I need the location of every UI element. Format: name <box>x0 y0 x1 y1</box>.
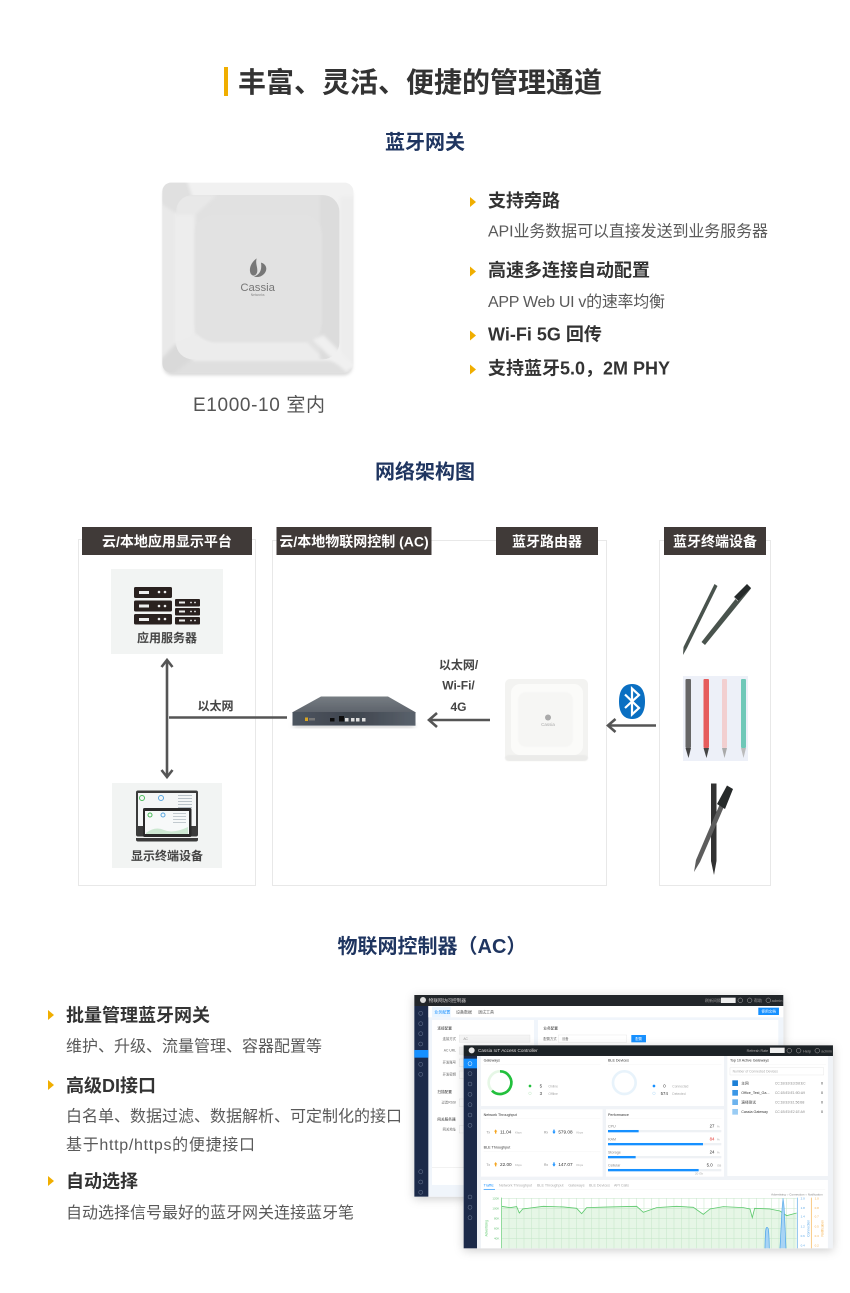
title: 丰富、灵活、便捷的管理通道 <box>238 66 602 98</box>
screenshot: front window: 0 <box>821 1110 823 1114</box>
image: gateway E1000 <box>160 180 357 377</box>
screenshot: back window: 连接配置 <box>437 1025 452 1030</box>
screenshot: back window: 使用文档 <box>761 1009 776 1014</box>
screenshot: front window: 主网 <box>741 1080 749 1085</box>
screenshot: front window: Rx <box>544 1130 548 1134</box>
screenshot: back window: 物联网访问控制器 <box>429 997 466 1004</box>
screenshot: front window: 0.5 <box>815 1224 819 1228</box>
screenshot: front window: 1.4 <box>801 1215 805 1219</box>
screenshot: front window: Traffic <box>484 1184 494 1188</box>
panel: Bluetooth devices <box>660 527 770 886</box>
screenshot: front window: Kbps <box>576 1163 584 1167</box>
screenshot: back window: admin <box>772 998 782 1003</box>
screenshot: front window: 60K <box>494 1227 499 1231</box>
screenshot: front window: 40K <box>494 1237 499 1241</box>
screenshot: front window: Kbps <box>576 1130 584 1134</box>
screenshot: front window: Connection <box>806 1220 810 1237</box>
screenshot: front window: 1.0 <box>815 1197 819 1201</box>
feature: 支持旁路: API业务数据可以直接发送到业务服务器 <box>488 222 768 240</box>
screenshot: back window: AC URL <box>444 1049 456 1053</box>
screenshot: front window: 0 <box>821 1081 823 1085</box>
screenshot: front window: 22.00 <box>500 1162 512 1167</box>
icon: monitor and laptop <box>136 790 198 842</box>
screenshot: front window: 24 <box>710 1150 715 1155</box>
heading: 蓝牙网关: 蓝牙网关 <box>385 131 465 154</box>
screenshot: back window: 网关地址 <box>443 1127 457 1132</box>
image: coloured pens <box>683 676 748 761</box>
heading: 网络架构图: 网络架构图 <box>375 460 475 484</box>
screenshot: back window: 开发密钥 <box>443 1072 457 1077</box>
screenshot: front window: Online <box>548 1085 558 1089</box>
feature: 自动选择: 自动选择 <box>66 1172 138 1192</box>
card: display device: 显示终端设备 <box>131 848 203 863</box>
screenshot: front window: Office_Test_Ga... <box>741 1091 769 1095</box>
icon: Bluetooth <box>619 684 645 719</box>
screenshot: front window: 27 <box>710 1124 715 1129</box>
feature: 高速多连接自动配置 <box>470 260 665 311</box>
screenshot: front window: 120K <box>492 1197 499 1201</box>
screenshot: front window: BLE Throughput <box>537 1184 564 1188</box>
screenshot: front window: Top 10 Active Gateways <box>730 1058 769 1062</box>
screenshot: front window: 20 Gb <box>695 1172 703 1176</box>
image: mini gateway <box>505 679 588 761</box>
feature: 批量管理蓝牙网关: 维护、升级、流量管理、容器配置等 <box>66 1038 322 1056</box>
screenshot: front window: % <box>717 1151 720 1155</box>
panel header: router <box>496 527 598 555</box>
feature: 支持旁路: 支持旁路 <box>488 190 560 211</box>
screenshot: front window: BLE Devices <box>608 1058 629 1062</box>
screenshot: front window: 0 <box>821 1091 823 1095</box>
arrow: pens to router <box>608 719 656 732</box>
feature: 高级DI接口: 基于http/https的便捷接口 <box>66 1136 255 1154</box>
screenshot: front window: 84 <box>710 1137 715 1142</box>
screenshot: front window: CC:1B:E0:E3:D8:EC <box>775 1081 806 1085</box>
screenshot: front window: Kbps <box>515 1163 522 1167</box>
screenshot: front window: Kbps <box>515 1130 522 1134</box>
connector: ethernet line <box>169 716 287 719</box>
screenshot: back window: 配置方式 <box>543 1036 557 1041</box>
screenshot: front window: Cassia Gateway <box>741 1110 768 1114</box>
image: AC appliance <box>292 696 416 728</box>
feature: 支持蓝牙5.0: 支持蓝牙5.0，2M PHY <box>488 358 670 378</box>
screenshot: front window <box>464 1045 833 1248</box>
screenshot: front window: 1.8 <box>801 1206 805 1210</box>
feature: 自动选择 <box>48 1172 354 1222</box>
screenshot: back window: 设备 <box>562 1036 569 1041</box>
panel header: 蓝牙终端设备 <box>673 534 757 550</box>
dashboard screenshots <box>414 995 833 1248</box>
screenshot: back window: 设备数据 <box>456 1008 472 1014</box>
card: application server <box>111 569 223 654</box>
label: ethernet wifi 4G: 以太网/ <box>439 657 479 672</box>
arrow: router to AC <box>429 713 490 727</box>
panel header: AC <box>276 527 432 555</box>
logo: Cassia: Networks <box>251 293 265 297</box>
card: application server: 应用服务器 <box>137 630 197 645</box>
screenshot: front window: Rx <box>544 1163 548 1167</box>
screenshot: front window: 147.07 <box>558 1162 573 1167</box>
screenshot: front window: Detected <box>672 1092 686 1096</box>
screenshot: back window: 网关服务器 <box>437 1116 456 1121</box>
screenshot: front window: Performance <box>608 1113 629 1117</box>
screenshot: front window: 演绎测试 <box>741 1099 756 1104</box>
screenshot: front window: RAM <box>608 1138 616 1142</box>
label: ethernet wifi 4G: Wi-Fi/ <box>442 678 475 692</box>
feature list: AC <box>48 1004 402 1222</box>
screenshot: front window: 80K <box>494 1217 499 1221</box>
feature: 自动选择: 自动选择信号最好的蓝牙网关连接蓝牙笔 <box>66 1204 354 1222</box>
screenshot: back window: 配置 <box>635 1036 643 1041</box>
feature: 高级DI接口: 白名单、数据过滤、数据解析、可定制化的接口 <box>66 1108 402 1126</box>
label: ethernet wifi 4G <box>439 657 479 714</box>
logo: Cassia <box>240 258 276 297</box>
panel header <box>82 527 252 555</box>
label: 以太网 (left): 以太网 <box>197 698 234 713</box>
screenshot: front window: % <box>717 1138 720 1142</box>
feature: 高级DI接口 <box>48 1075 402 1154</box>
image: mini gateway: Cassia <box>541 722 555 727</box>
panel header: AC: 云/本地物联网控制 (AC) <box>279 534 429 550</box>
card: display device <box>112 783 222 868</box>
screenshot: front window: 3 <box>540 1091 543 1096</box>
screenshot: front window: Connected <box>672 1085 689 1089</box>
screenshot: back window: 业务配置 <box>543 1025 558 1030</box>
screenshot: front window: Advertising ○ Connection ○ Notification <box>771 1192 823 1196</box>
screenshot: back window: AC <box>463 1037 469 1041</box>
screenshot: front window: Tx <box>486 1163 490 1167</box>
screenshot: back window <box>414 995 783 1197</box>
screenshot: front window: Network Throughput <box>499 1184 532 1188</box>
screenshot: back window: 开发账号 <box>443 1060 457 1065</box>
screenshot: front window: 1.2 <box>801 1224 805 1228</box>
screenshot: front window: Help <box>803 1048 812 1053</box>
screenshot: front window: 0.7 <box>815 1215 819 1219</box>
feature: Wi-Fi 5G 回传: Wi-Fi 5G 回传 <box>488 324 602 344</box>
panel: application platform <box>78 527 256 886</box>
screenshot: front window: CPU <box>608 1125 616 1129</box>
caption: E1000-10 室内: E1000-10 室内 <box>193 394 325 416</box>
screenshot: back window: 帮助 <box>754 997 762 1003</box>
screenshot: front window: 5.0 <box>707 1163 713 1168</box>
screenshot: back window: 连接方式 <box>443 1036 457 1041</box>
icon: servers <box>134 587 200 624</box>
image: pens pair <box>683 584 751 655</box>
screenshot: front window: CC:1B:E0:E2:1E:A9 <box>775 1110 805 1114</box>
screenshot: front window: 0.2 <box>815 1244 819 1248</box>
screenshot: front window: 0 <box>663 1084 666 1089</box>
screenshot: front window: 2.0 <box>801 1197 805 1201</box>
screenshot: front window: Number of Connected Devices <box>733 1070 778 1074</box>
screenshot: back window: 业务配置 <box>434 1008 450 1014</box>
screenshot: front window: CC:1B:E0:E1:56:B8 <box>775 1100 805 1104</box>
feature: 批量管理蓝牙网关 <box>48 1004 322 1056</box>
screenshot: front window: 11.04 <box>500 1129 512 1134</box>
screenshot: back window: 调试工具 <box>478 1008 494 1014</box>
screenshot: front window: Cassia IoT Access Controller <box>478 1048 538 1053</box>
screenshot: front window: 579.08 <box>558 1129 573 1134</box>
screenshot: front window: Advertising <box>484 1220 488 1237</box>
logo: Cassia: Cassia <box>240 282 276 294</box>
panel header: 云/本地应用显示平台 <box>102 534 232 550</box>
feature: 高速多连接自动配置: 高速多连接自动配置 <box>488 260 650 280</box>
screenshot: front window: BLE Throughput <box>484 1146 510 1150</box>
screenshot: front window: Refresh Rate <box>747 1049 768 1053</box>
feature: 批量管理蓝牙网关: 批量管理蓝牙网关 <box>66 1004 210 1026</box>
feature: 支持旁路 <box>470 190 768 240</box>
feature list: gateway <box>470 190 768 378</box>
screenshot: front window: Cellular <box>608 1164 621 1168</box>
screenshot: front window: 0 <box>821 1100 823 1104</box>
screenshot: front window: 0.3 <box>815 1234 819 1238</box>
screenshot: front window: admin <box>821 1048 832 1053</box>
screenshot: front window: 100K <box>492 1207 499 1211</box>
screenshot: front window: 574 <box>661 1091 668 1096</box>
screenshot: front window: Offline <box>548 1092 558 1096</box>
panel header <box>664 527 766 555</box>
screenshot: back window: 过滤RSSI <box>442 1100 456 1105</box>
screenshot: front window: Gateways <box>484 1058 500 1062</box>
screenshot: front window: CC:1B:E0:E1:9D:A9 <box>775 1091 805 1095</box>
arrow: two-way vertical <box>162 660 172 777</box>
screenshot: front window: 0.8 <box>815 1206 819 1210</box>
panel header: router: 蓝牙路由器 <box>512 534 582 550</box>
heading: 物联网控制器: 物联网控制器（AC） <box>338 935 526 958</box>
screenshot: front window: Network Throughput <box>484 1113 517 1117</box>
label: ethernet wifi 4G: 4G <box>450 700 467 714</box>
screenshot: front window: Storage <box>608 1151 621 1155</box>
screenshot: front window: Tx <box>486 1130 490 1134</box>
screenshot: front window: GB <box>717 1164 721 1168</box>
screenshot: back window: 刷新间隔 <box>705 997 721 1003</box>
image: black pens <box>694 784 733 875</box>
feature: 高速多连接自动配置: APP Web UI v的速率均衡 <box>488 293 665 311</box>
screenshot: front window: API Calls <box>614 1184 629 1188</box>
panel: AC and gateway <box>169 527 606 886</box>
screenshot: front window: Gateways <box>568 1184 585 1188</box>
screenshot: back window: 扫描配置 <box>437 1089 452 1094</box>
screenshot: front window: % <box>717 1125 720 1129</box>
screenshot: front window: 0.4 <box>801 1244 805 1248</box>
screenshot: front window: BLE Devices <box>589 1184 610 1188</box>
feature: 高级DI接口: 高级DI接口 <box>66 1075 156 1096</box>
screenshot: front window: 0.6 <box>801 1234 805 1238</box>
screenshot: front window: Notification <box>820 1220 824 1237</box>
screenshot: front window: 5 <box>540 1084 543 1089</box>
